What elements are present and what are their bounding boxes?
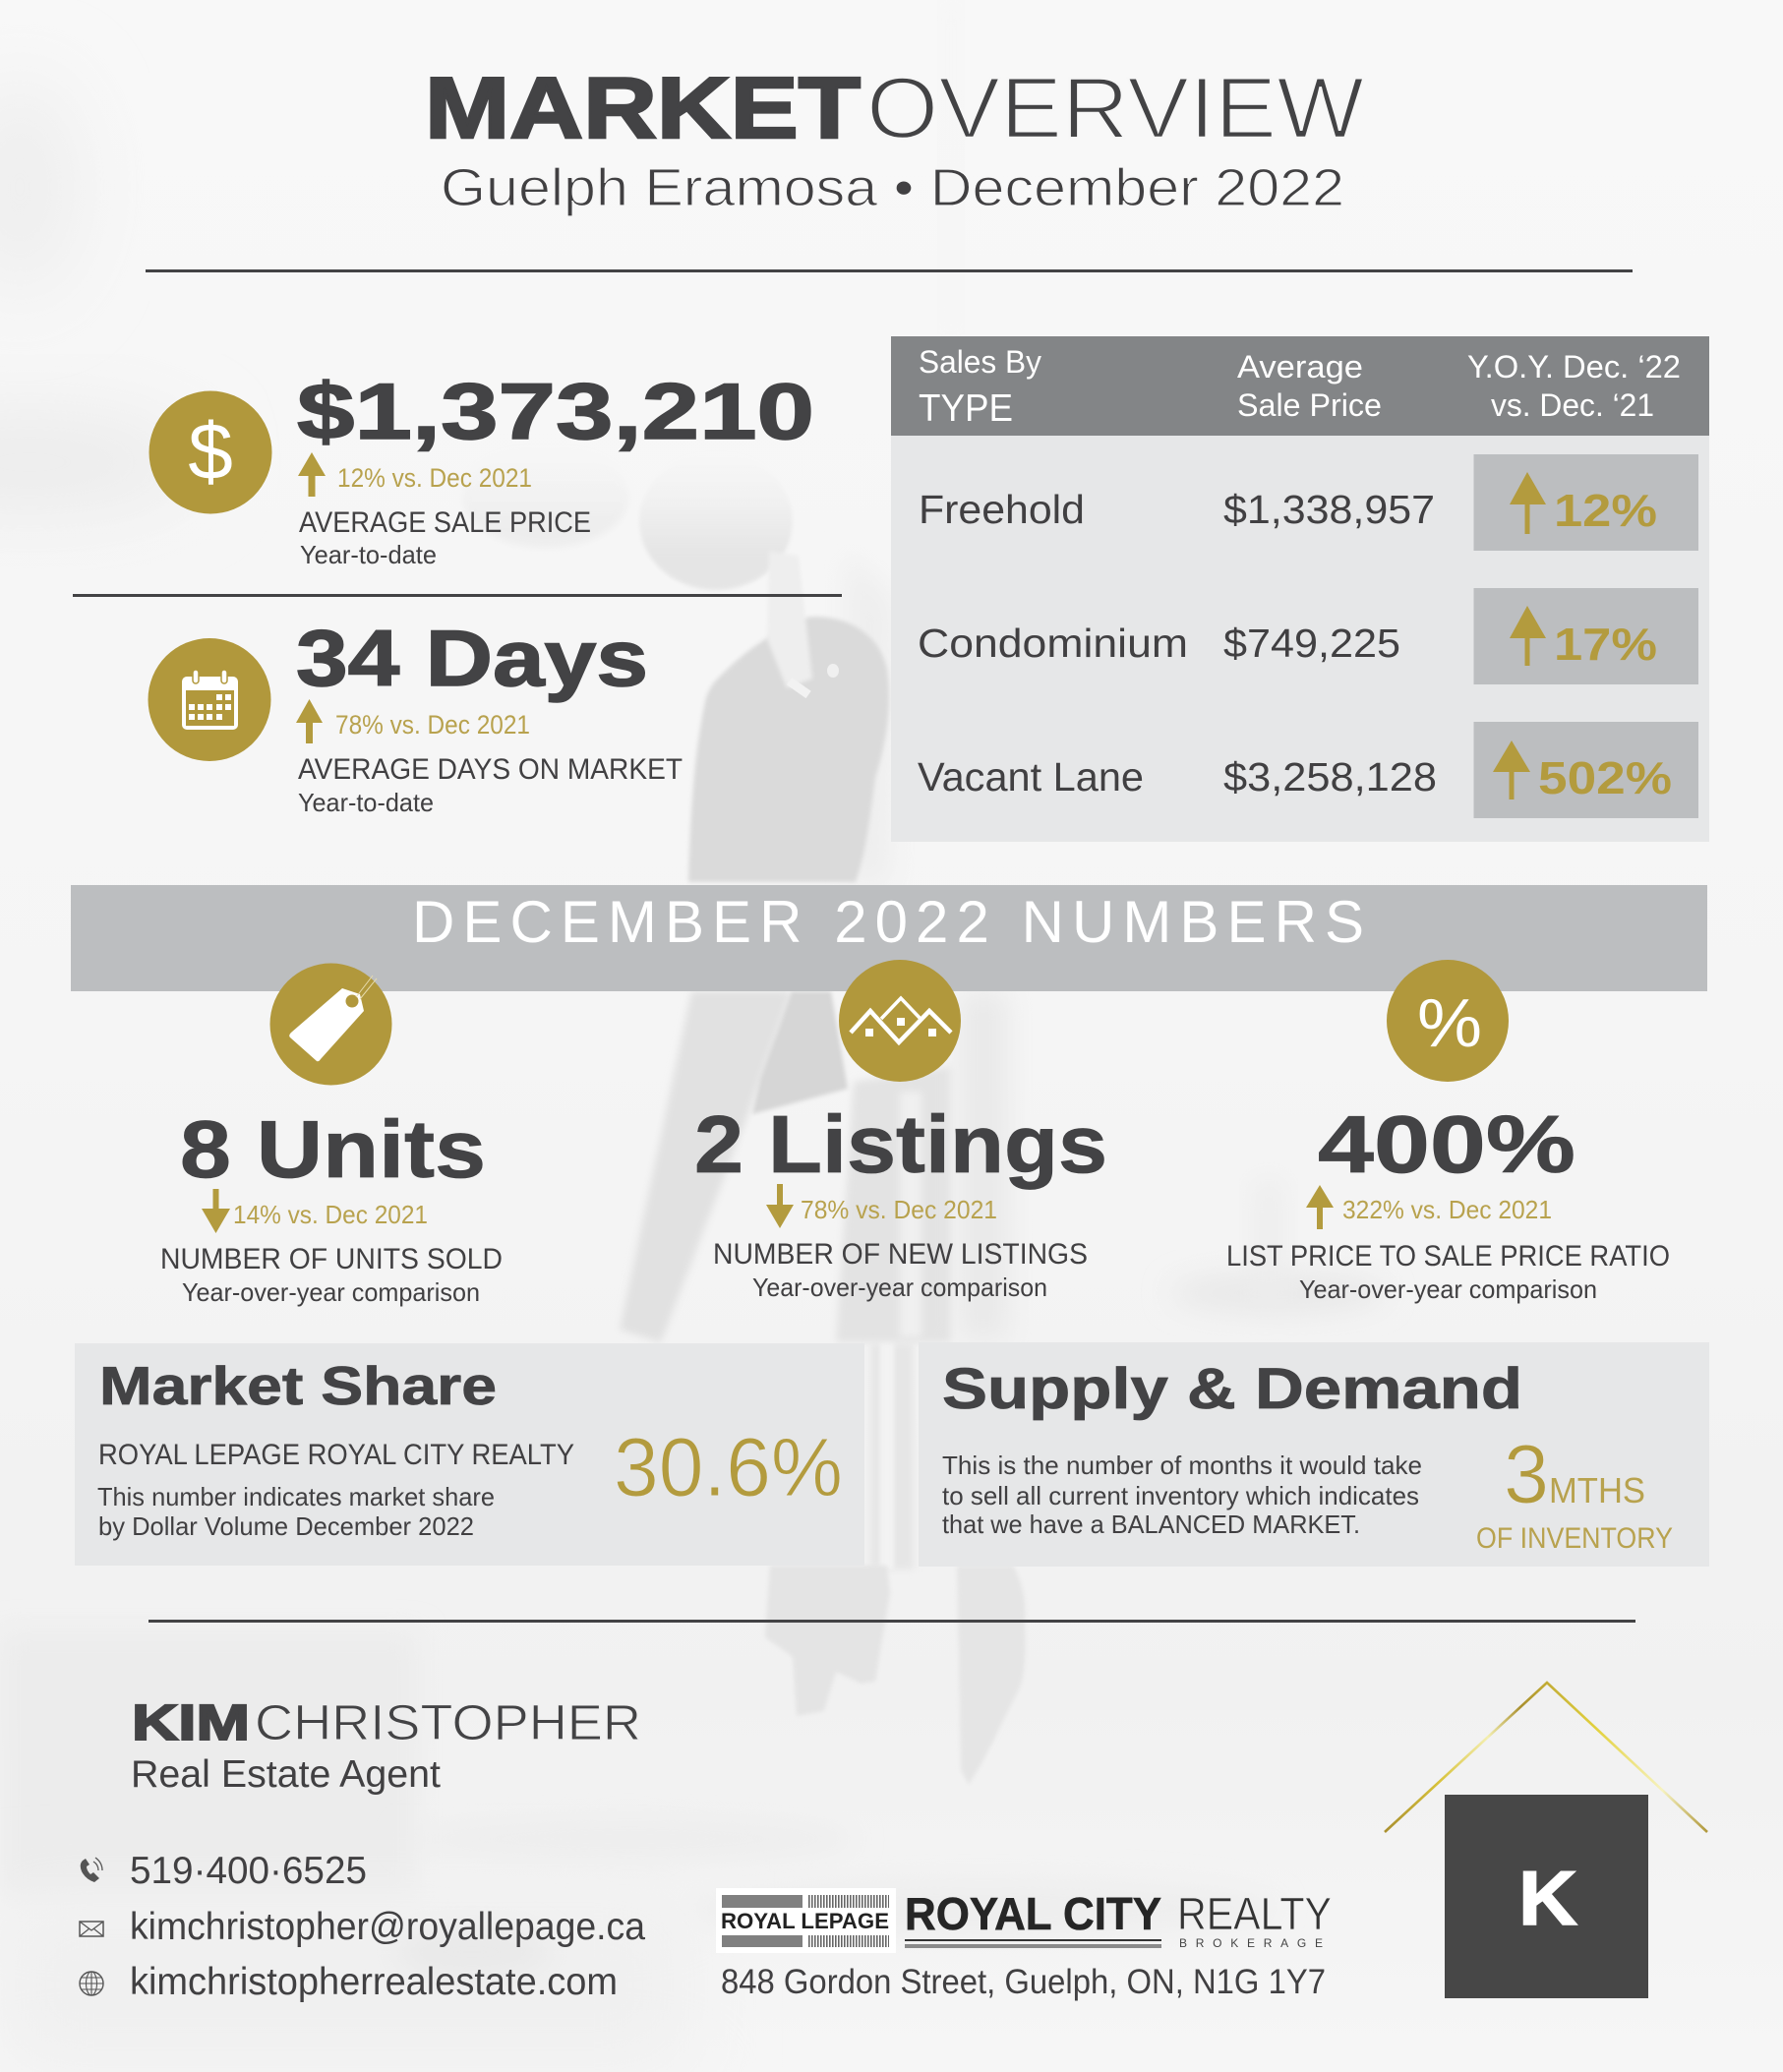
title: OVERVIEW (866, 59, 1364, 156)
icon: dollar (149, 391, 271, 513)
icon: percent (1387, 960, 1509, 1082)
section banner: DECEMBER 2022 NUMBERS (412, 889, 1364, 955)
logo: royal city realty: BROKERAGE (1179, 1936, 1323, 1950)
icon: calendar (148, 638, 271, 761)
table header: Sale Price (1237, 387, 1382, 423)
icon: dollar: $ (188, 407, 233, 497)
stat: list to sale price ratio (1226, 960, 1670, 1304)
label: AVERAGE DAYS ON MARKET (298, 753, 683, 786)
arrow up (298, 452, 326, 497)
value: 400% (1318, 1098, 1575, 1190)
label: AVERAGE SALE PRICE (299, 506, 591, 539)
value (1476, 1428, 1673, 1555)
row: vacant lane: Vacant Lane (918, 754, 1144, 799)
title: MARKET (425, 59, 861, 156)
table header: vs. Dec. ‘21 (1491, 387, 1654, 423)
description (942, 1450, 1422, 1539)
logo: royal lepage: ROYAL LEPAGE (721, 1909, 889, 1933)
sublabel: Year-to-date (298, 788, 434, 817)
logo: royal city realty: REALTY (1177, 1888, 1332, 1939)
value: 34 Days (296, 615, 648, 703)
logo: K house (1385, 1683, 1707, 1998)
row: condominium: 17% (1554, 619, 1657, 670)
logo: royal lepage (716, 1888, 896, 1953)
icon: houses (839, 960, 961, 1082)
arrow down (766, 1184, 794, 1228)
address: 848 Gordon Street, Guelph, ON, N1G 1Y7 (721, 1963, 1326, 2001)
value: 2 Listings (694, 1098, 1107, 1190)
stat: units sold (160, 964, 503, 1307)
sublabel: Year-over-year comparison (1299, 1274, 1597, 1304)
contact: website: kimchristopherrealestate.com (130, 1961, 618, 2003)
table header: Average (1237, 349, 1363, 385)
row: condominium: $749,225 (1223, 621, 1400, 666)
table header: TYPE (919, 387, 1013, 430)
heading: Market Share (99, 1355, 497, 1416)
row: freehold: 12% (1554, 485, 1657, 536)
agent name: KIM (132, 1694, 250, 1750)
value: 30.6% (614, 1421, 843, 1513)
label: NUMBER OF NEW LISTINGS (713, 1238, 1088, 1271)
description: that we have a BALANCED MARKET. (942, 1510, 1360, 1539)
value: 8 Units (180, 1103, 486, 1195)
heading: Supply & Demand (942, 1357, 1522, 1421)
sublabel: Year-over-year comparison (752, 1273, 1047, 1302)
contact: phone: 519·400·6525 (130, 1850, 367, 1892)
row: freehold: $1,338,957 (1223, 487, 1435, 532)
icon: price tag (269, 964, 391, 1086)
section banner (71, 885, 1707, 991)
comparison: 322% vs. Dec 2021 (1342, 1195, 1552, 1224)
panel: sales by type table (891, 336, 1709, 842)
row: vacant lane: $3,258,128 (1223, 754, 1437, 799)
description (97, 1482, 495, 1541)
stat: average sale price (149, 368, 814, 569)
brokerage name: ROYAL LEPAGE ROYAL CITY REALTY (98, 1439, 574, 1471)
title (425, 59, 1364, 156)
value: MTHS (1549, 1470, 1645, 1510)
label: LIST PRICE TO SALE PRICE RATIO (1226, 1240, 1670, 1273)
value: $1,373,210 (297, 368, 814, 456)
description: to sell all current inventory which indicates (942, 1481, 1419, 1510)
panel: market share (75, 1343, 864, 1566)
table header: Y.O.Y. Dec. ‘22 (1467, 349, 1681, 385)
description: by Dollar Volume December 2022 (98, 1511, 474, 1541)
arrow up (296, 699, 323, 743)
value: 3 (1504, 1428, 1549, 1520)
panel: supply and demand (919, 1342, 1709, 1567)
agent title: Real Estate Agent (131, 1753, 441, 1796)
sublabel: Year-to-date (300, 540, 437, 569)
description: This number indicates market share (97, 1482, 495, 1511)
row: condominium (918, 588, 1698, 684)
comparison: 12% vs. Dec 2021 (337, 463, 532, 493)
logo: royal city realty (905, 1888, 1332, 1950)
row: freehold (919, 454, 1698, 551)
row: vacant lane: 502% (1538, 752, 1672, 803)
sublabel: Year-over-year comparison (182, 1277, 480, 1307)
agent name: CHRISTOPHER (255, 1694, 641, 1750)
contact: email: kimchristopher@royallepage.ca (130, 1906, 645, 1948)
subtitle: Guelph Eramosa • December 2022 (441, 158, 1344, 217)
stat: new listings (694, 960, 1107, 1302)
table header (891, 336, 1709, 436)
row: vacant lane (918, 722, 1698, 818)
logo: K house: K (1518, 1855, 1577, 1941)
logo: royal city realty: ROYAL CITY (905, 1888, 1161, 1939)
row: condominium: Condominium (918, 621, 1188, 666)
stat: average days on market (148, 615, 683, 817)
label: NUMBER OF UNITS SOLD (160, 1243, 503, 1275)
row: freehold: Freehold (919, 487, 1085, 532)
arrow down (202, 1189, 230, 1233)
table header: Sales By (919, 344, 1041, 380)
icon: percent: % (1417, 984, 1482, 1061)
value: OF INVENTORY (1476, 1522, 1673, 1555)
arrow up (1306, 1185, 1334, 1229)
comparison: 14% vs. Dec 2021 (233, 1200, 428, 1229)
description: This is the number of months it would take (942, 1450, 1422, 1480)
comparison: 78% vs. Dec 2021 (801, 1195, 997, 1224)
comparison: 78% vs. Dec 2021 (335, 710, 530, 740)
